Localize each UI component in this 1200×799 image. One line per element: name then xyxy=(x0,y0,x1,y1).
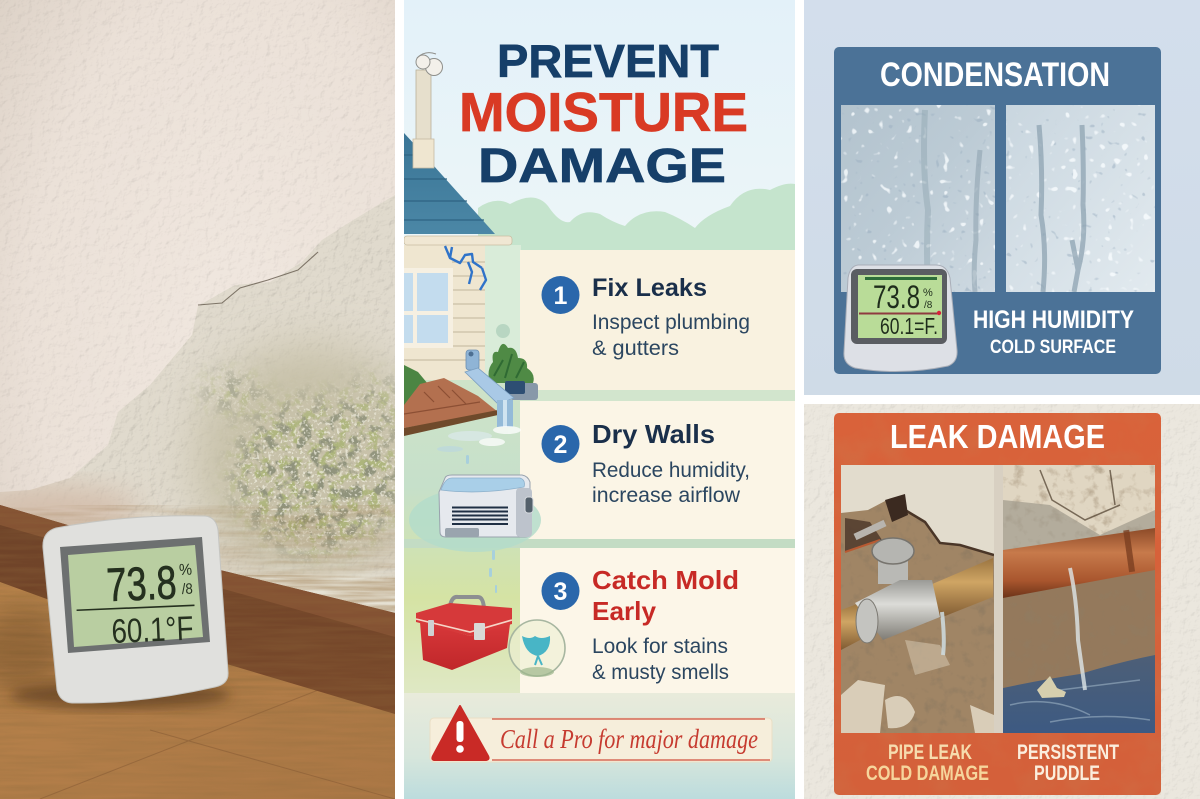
step cards xyxy=(404,250,795,693)
tee fitting xyxy=(855,538,940,643)
humidity reading: 73.8 xyxy=(105,555,178,611)
step 1 text: & gutters xyxy=(592,337,679,360)
divider line xyxy=(859,312,939,314)
copper pipe xyxy=(1003,528,1155,598)
left window pane xyxy=(841,105,995,292)
condensation heading: CONDENSATION xyxy=(880,56,1110,94)
title line 2: MOISTURE xyxy=(459,81,748,143)
humidity reading: 73.8 xyxy=(873,279,920,315)
rubble xyxy=(841,640,994,733)
chimney pipe and cap xyxy=(413,53,442,168)
caption puddle: PUDDLE xyxy=(1034,762,1100,785)
banner rules xyxy=(492,719,770,760)
title line 1: PREVENT xyxy=(497,35,719,87)
leak card xyxy=(834,413,1161,795)
baseboard xyxy=(0,505,395,714)
drip xyxy=(466,455,469,464)
display bezel xyxy=(851,269,947,344)
rock xyxy=(1037,676,1066,698)
siding lines xyxy=(404,262,485,360)
plaster edge cracks xyxy=(905,510,994,555)
small unit: /8 xyxy=(181,581,193,598)
pipes xyxy=(930,558,993,618)
photo: tee joint leak xyxy=(841,465,994,733)
card backgrounds xyxy=(404,250,795,693)
number badge 2 xyxy=(542,425,580,463)
step 2 text: Reduce humidity, xyxy=(592,459,750,482)
panel: mouldy wall photo with hygrometer xyxy=(0,0,425,799)
bushes and planter xyxy=(404,324,538,418)
condensation card xyxy=(834,47,1161,374)
strip between house and cards xyxy=(485,245,521,380)
step 2 text xyxy=(593,462,748,502)
hole xyxy=(885,494,908,522)
temperature reading: 60.1°F xyxy=(111,610,194,651)
step 1 text: Inspect plumbing xyxy=(592,311,750,334)
panel: leak damage xyxy=(804,404,1200,799)
crack in plaster xyxy=(198,252,318,305)
status bar xyxy=(865,277,937,280)
water stream xyxy=(942,612,944,655)
downspout xyxy=(465,350,514,404)
banner text: Call a Pro for major damage xyxy=(500,724,758,754)
right window pane xyxy=(1006,105,1155,292)
display bezel xyxy=(60,537,210,653)
footer background xyxy=(404,693,795,799)
water drops xyxy=(489,550,497,593)
leak drips xyxy=(445,246,486,290)
hygrometer device xyxy=(844,265,957,372)
plaster wall xyxy=(0,0,395,492)
house wall xyxy=(404,245,485,380)
number badge 1: 1 xyxy=(554,282,568,310)
number badge 2: 2 xyxy=(554,431,567,459)
leak heading: LEAK DAMAGE xyxy=(890,418,1105,455)
caption persistent: PERSISTENT xyxy=(1017,741,1119,764)
number badge 3 xyxy=(542,572,580,610)
ground strip xyxy=(404,375,520,693)
LCD screen xyxy=(858,275,942,338)
gutter xyxy=(404,236,512,245)
brick path xyxy=(404,378,498,436)
photo: copper pipe and puddle xyxy=(1003,465,1155,733)
panel: prevent moisture damage poster xyxy=(404,0,795,799)
illustration: house xyxy=(404,53,538,464)
warning banner xyxy=(430,706,772,762)
illustration: red toolbox xyxy=(416,597,512,670)
step 3 text xyxy=(592,635,729,684)
panel: condensation xyxy=(804,0,1200,395)
step 3 text: & musty smells xyxy=(592,661,729,684)
step 3 text: Look for stains xyxy=(592,635,728,658)
water puddles xyxy=(437,426,521,452)
step 3 heading: Early xyxy=(592,596,657,626)
small unit: /8 xyxy=(924,300,933,311)
upper plaster xyxy=(841,465,994,555)
damp stain area xyxy=(0,195,395,606)
panel background wall xyxy=(804,404,1200,799)
mould patches xyxy=(194,364,395,562)
percent symbol: % xyxy=(179,562,192,579)
window xyxy=(404,268,453,348)
pour off water xyxy=(497,400,513,427)
puddle xyxy=(1003,655,1155,733)
step 2 text: increase airflow xyxy=(592,484,741,507)
step 2 xyxy=(542,424,748,502)
step 1 heading: Fix Leaks xyxy=(592,274,707,302)
left divider xyxy=(994,465,1003,733)
illustration: magnifier with mould xyxy=(509,620,565,677)
title xyxy=(462,44,746,183)
step 1 xyxy=(542,274,750,360)
title line 3: DAMAGE xyxy=(478,140,726,193)
divider line xyxy=(77,605,195,611)
LCD screen xyxy=(68,545,203,647)
caption line 1: HIGH HUMIDITY xyxy=(973,306,1134,334)
caption line 2: COLD SURFACE xyxy=(990,337,1116,358)
lower caption xyxy=(973,306,1134,358)
percent symbol: % xyxy=(923,287,933,299)
wires xyxy=(855,523,885,537)
step 2 heading: Dry Walls xyxy=(592,419,715,449)
red marker xyxy=(937,311,941,315)
warning triangle icon xyxy=(432,706,489,760)
readings xyxy=(76,564,194,643)
wooden floor xyxy=(0,575,395,799)
banner strip xyxy=(430,718,772,762)
temperature reading: 60.1=F. xyxy=(880,313,938,339)
caption pipe leak: PIPE LEAK xyxy=(888,741,972,764)
sky background xyxy=(404,0,795,260)
step 1 text xyxy=(592,311,750,360)
left caption xyxy=(866,741,989,785)
water stream xyxy=(1070,568,1085,690)
step 3 heading xyxy=(593,570,738,626)
caption cold damage: COLD DAMAGE xyxy=(866,762,989,785)
roof xyxy=(404,133,495,234)
illustration: dehumidifier xyxy=(439,475,533,537)
hygrometer device xyxy=(43,516,228,703)
step 3 xyxy=(542,565,739,684)
hygrometer shadow xyxy=(0,610,230,709)
step 3 heading: Catch Mold xyxy=(592,565,739,595)
panel background xyxy=(804,0,1200,395)
number badge 1 xyxy=(542,276,580,314)
tree line xyxy=(478,184,795,250)
number badge 3: 3 xyxy=(554,578,567,606)
puddle below dehumidifier xyxy=(409,488,541,552)
right caption xyxy=(1017,741,1119,785)
